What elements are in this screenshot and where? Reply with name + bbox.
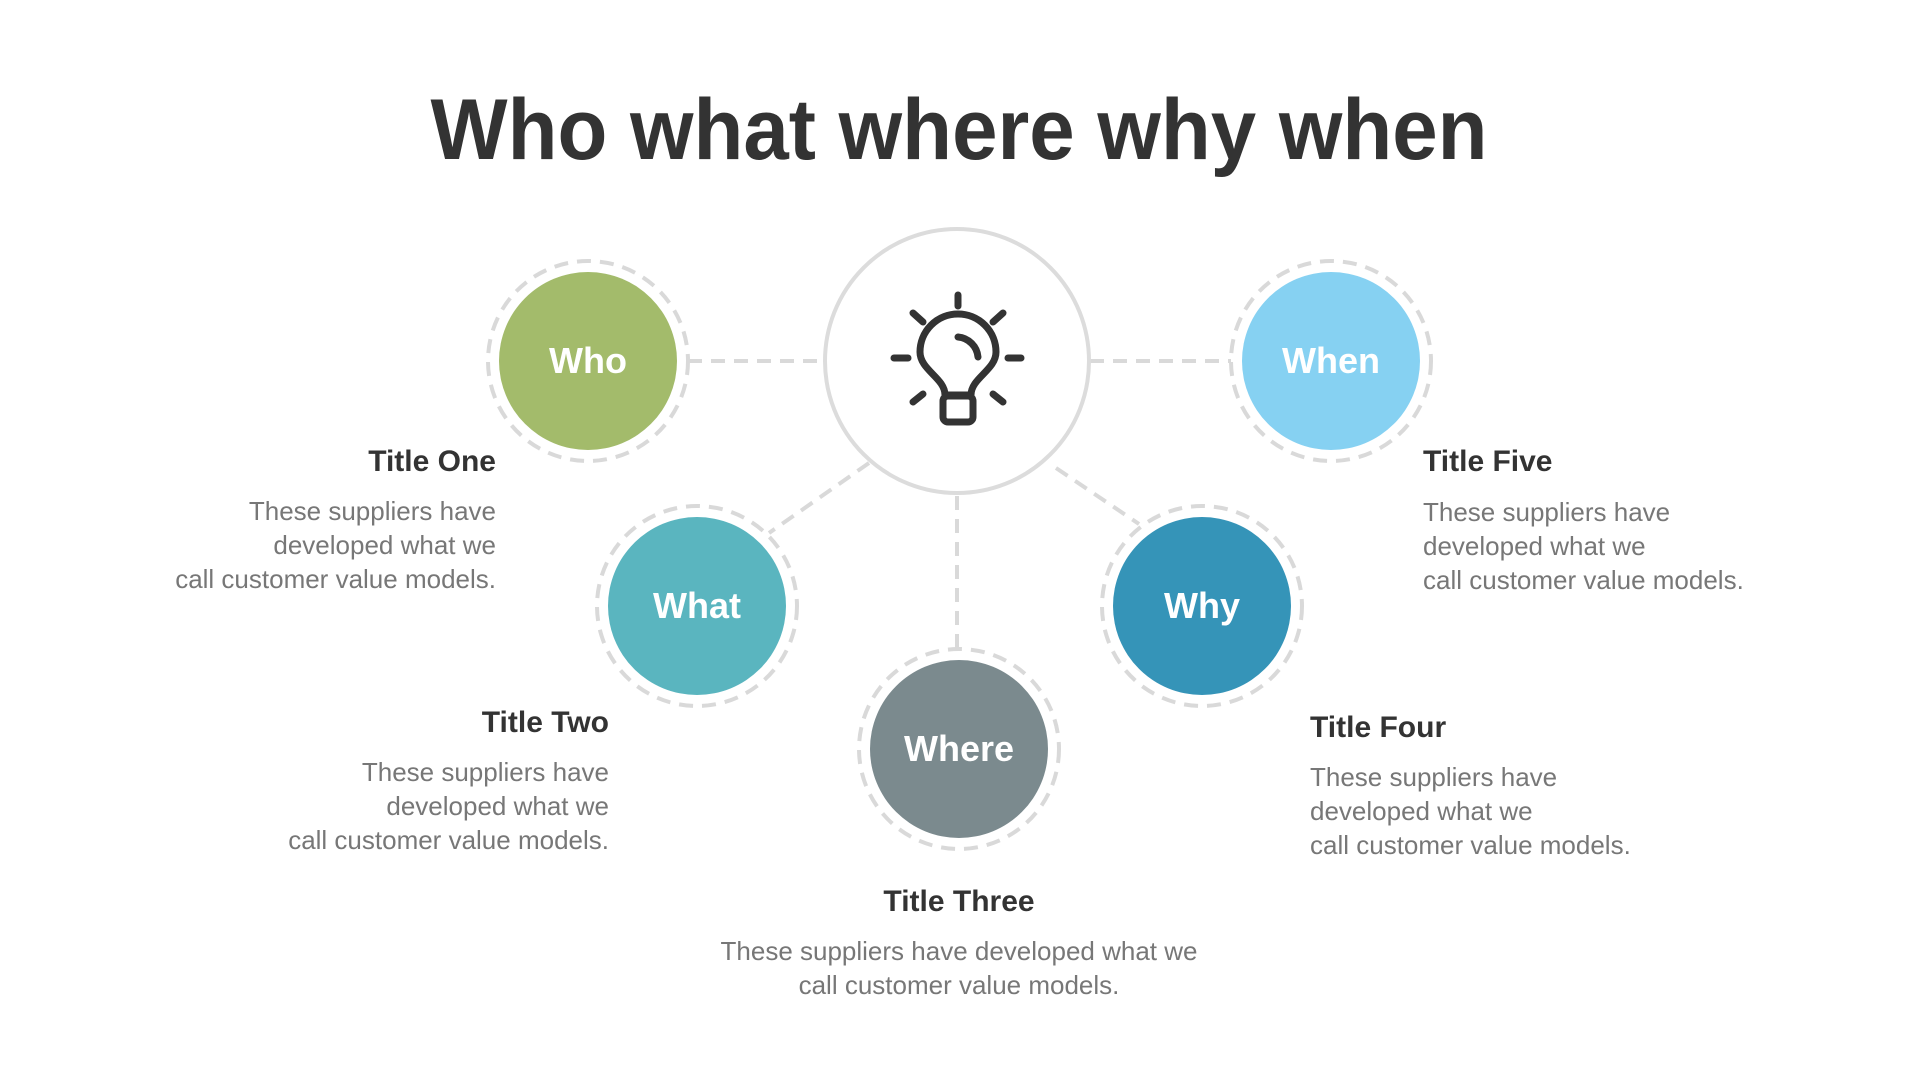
text block: Title Five: Title Five xyxy=(1423,445,1552,478)
connectors xyxy=(688,361,1231,649)
node: Who xyxy=(488,261,688,461)
text block: Title One: These suppliers have xyxy=(249,496,496,526)
text block: Title Five: call customer value models. xyxy=(1423,565,1744,595)
node: What: What xyxy=(653,585,741,626)
text block: Title Two xyxy=(288,706,609,855)
text block: Title Five xyxy=(1423,445,1744,595)
center circle with bulb icon xyxy=(825,229,1089,493)
text block: Title Five: These suppliers have xyxy=(1423,497,1670,527)
text block: Title Three: Title Three xyxy=(883,885,1035,918)
text block: Title One: developed what we xyxy=(273,530,496,560)
text block: Title One: Title One xyxy=(368,445,496,478)
text block: Title Three: call customer value models. xyxy=(799,970,1119,1000)
node: Why xyxy=(1102,506,1302,706)
text block: Title Five: developed what we xyxy=(1423,531,1646,561)
text block: Title Four: Title Four xyxy=(1310,711,1446,744)
text block: Title One: call customer value models. xyxy=(175,564,496,594)
node: Who: Who xyxy=(549,340,627,381)
text block: Title Two: These suppliers have xyxy=(362,757,609,787)
node: What xyxy=(597,506,797,706)
node: When xyxy=(1231,261,1431,461)
text block: Title Four: call customer value models. xyxy=(1310,830,1631,860)
text block: Title Four xyxy=(1310,711,1631,860)
node: Why: Why xyxy=(1164,585,1240,626)
text block: Title Four: developed what we xyxy=(1310,796,1533,826)
text block: Title Two: developed what we xyxy=(386,791,609,821)
title: Who what where why when xyxy=(430,82,1488,178)
node: Where xyxy=(859,649,1059,849)
text block: Title Four: These suppliers have xyxy=(1310,762,1557,792)
text block: Title Three xyxy=(721,885,1197,1000)
text block: Title Two: Title Two xyxy=(482,706,609,739)
icon: light bulb xyxy=(894,295,1021,422)
node: Where: Where xyxy=(904,728,1014,769)
text block: Title One xyxy=(175,445,496,594)
text block: Title Three: These suppliers have developed what we xyxy=(721,936,1197,966)
node: When: When xyxy=(1282,340,1380,381)
text block: Title Two: call customer value models. xyxy=(288,825,609,855)
